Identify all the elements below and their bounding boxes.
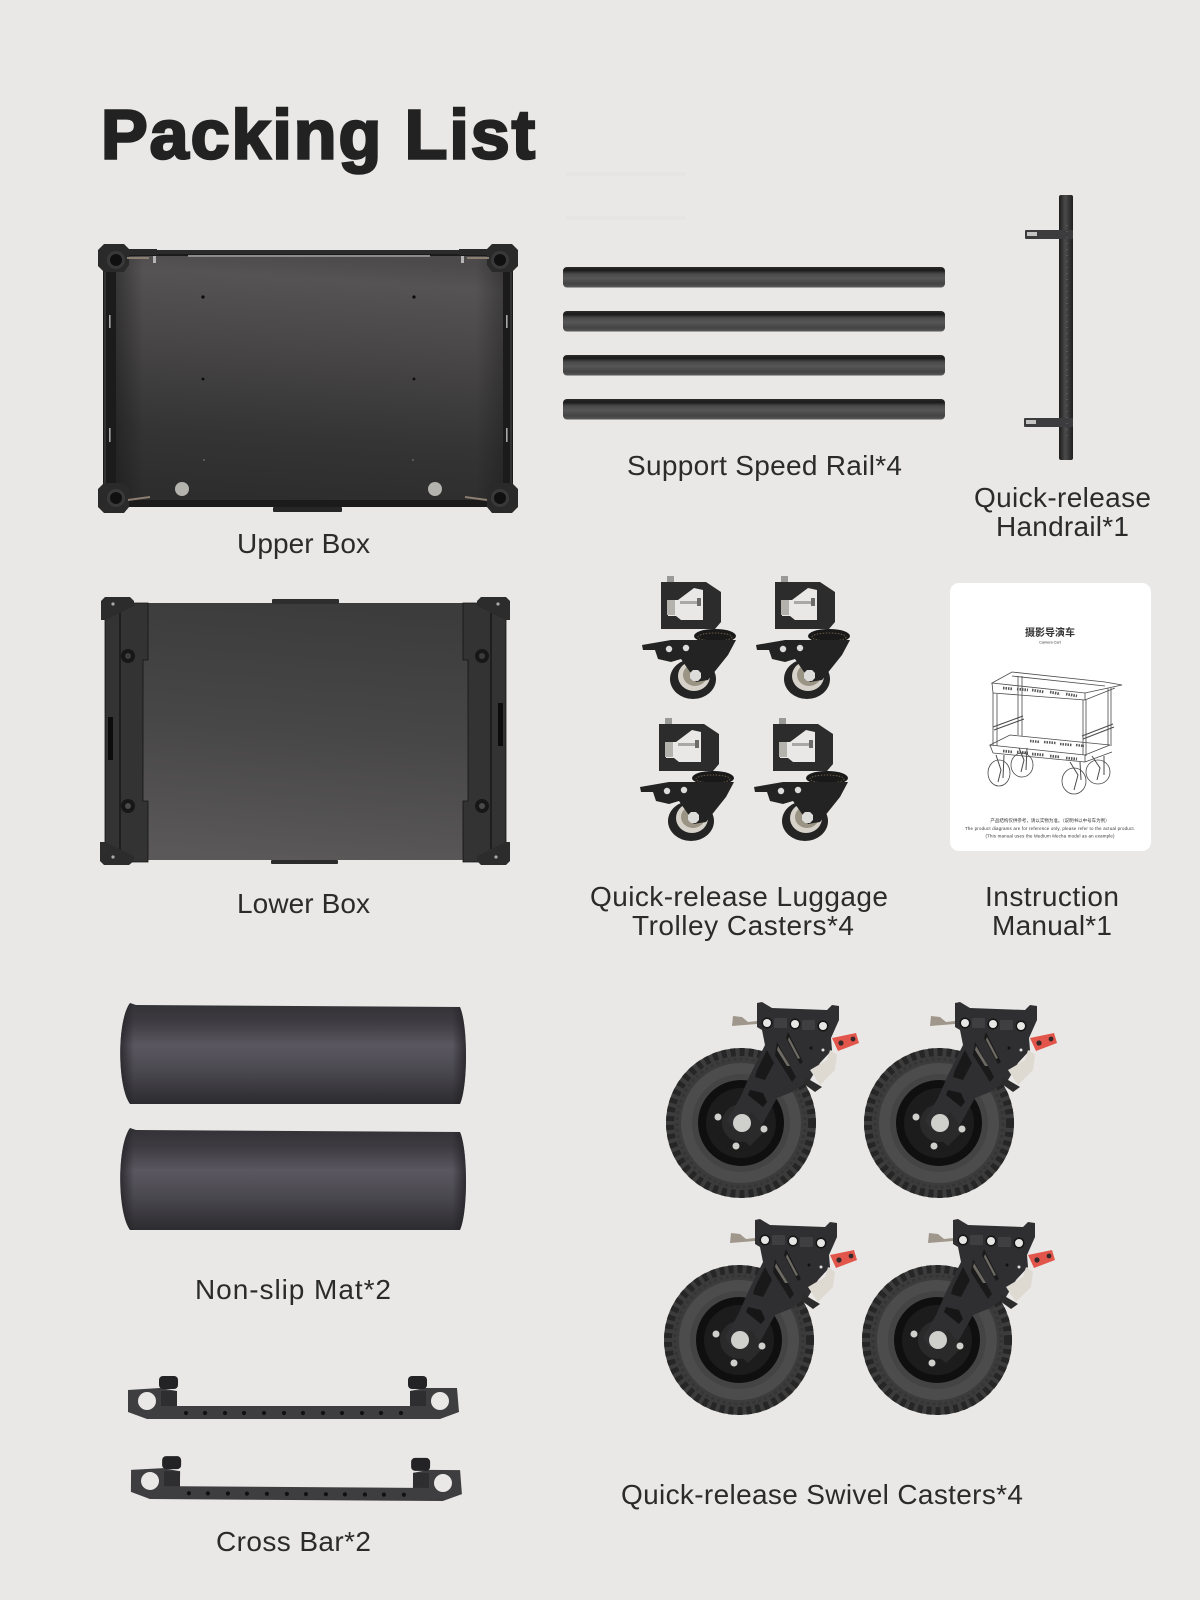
image: support speed rails	[563, 267, 945, 420]
image: instruction manual	[950, 583, 1151, 851]
label: luggage trolley casters: Trolley Casters*4	[632, 910, 854, 941]
label: cross bar: Cross Bar*2	[216, 1526, 371, 1557]
label: luggage trolley casters	[590, 881, 888, 941]
drawing: camera cart line art	[988, 672, 1122, 794]
image: instruction manual: 产品结构仅供参考，请以实物为准。（说明书以中号车为例）	[990, 817, 1110, 824]
image: quick-release swivel casters	[664, 1002, 1057, 1415]
image: instruction manual: 摄影导演车	[1025, 626, 1075, 639]
label: quick-release handrail: Quick-release	[974, 482, 1151, 513]
label: swivel casters: Quick-release Swivel Casters*4	[621, 1479, 1023, 1510]
image: non-slip mats	[120, 1003, 466, 1230]
label: quick-release handrail	[974, 482, 1151, 542]
image: cross bars	[128, 1376, 462, 1501]
label: luggage trolley casters: Quick-release Luggage	[590, 881, 888, 912]
label: instruction manual: Manual*1	[992, 910, 1112, 941]
label: upper box: Upper Box	[237, 528, 370, 559]
title: Packing List	[101, 96, 535, 174]
image: instruction manual: The product diagrams are for reference only, please refer to the actual product.	[965, 826, 1135, 831]
label: lower box: Lower Box	[237, 888, 370, 919]
image: quick-release luggage trolley casters	[640, 576, 850, 841]
image: lower box	[100, 597, 510, 865]
label: instruction manual: Instruction	[985, 881, 1119, 912]
image: upper box	[98, 244, 518, 513]
image: instruction manual: Camera Cart	[1039, 640, 1062, 644]
image: quick-release handrail	[1024, 195, 1073, 460]
label: non-slip mat: Non-slip Mat*2	[195, 1274, 391, 1305]
image: instruction manual: (This manual uses the Medium Mecha model as an example)	[986, 834, 1115, 838]
label: instruction manual	[985, 881, 1119, 941]
label: quick-release handrail: Handrail*1	[996, 511, 1129, 542]
label: support speed rail: Support Speed Rail*4	[627, 450, 902, 481]
